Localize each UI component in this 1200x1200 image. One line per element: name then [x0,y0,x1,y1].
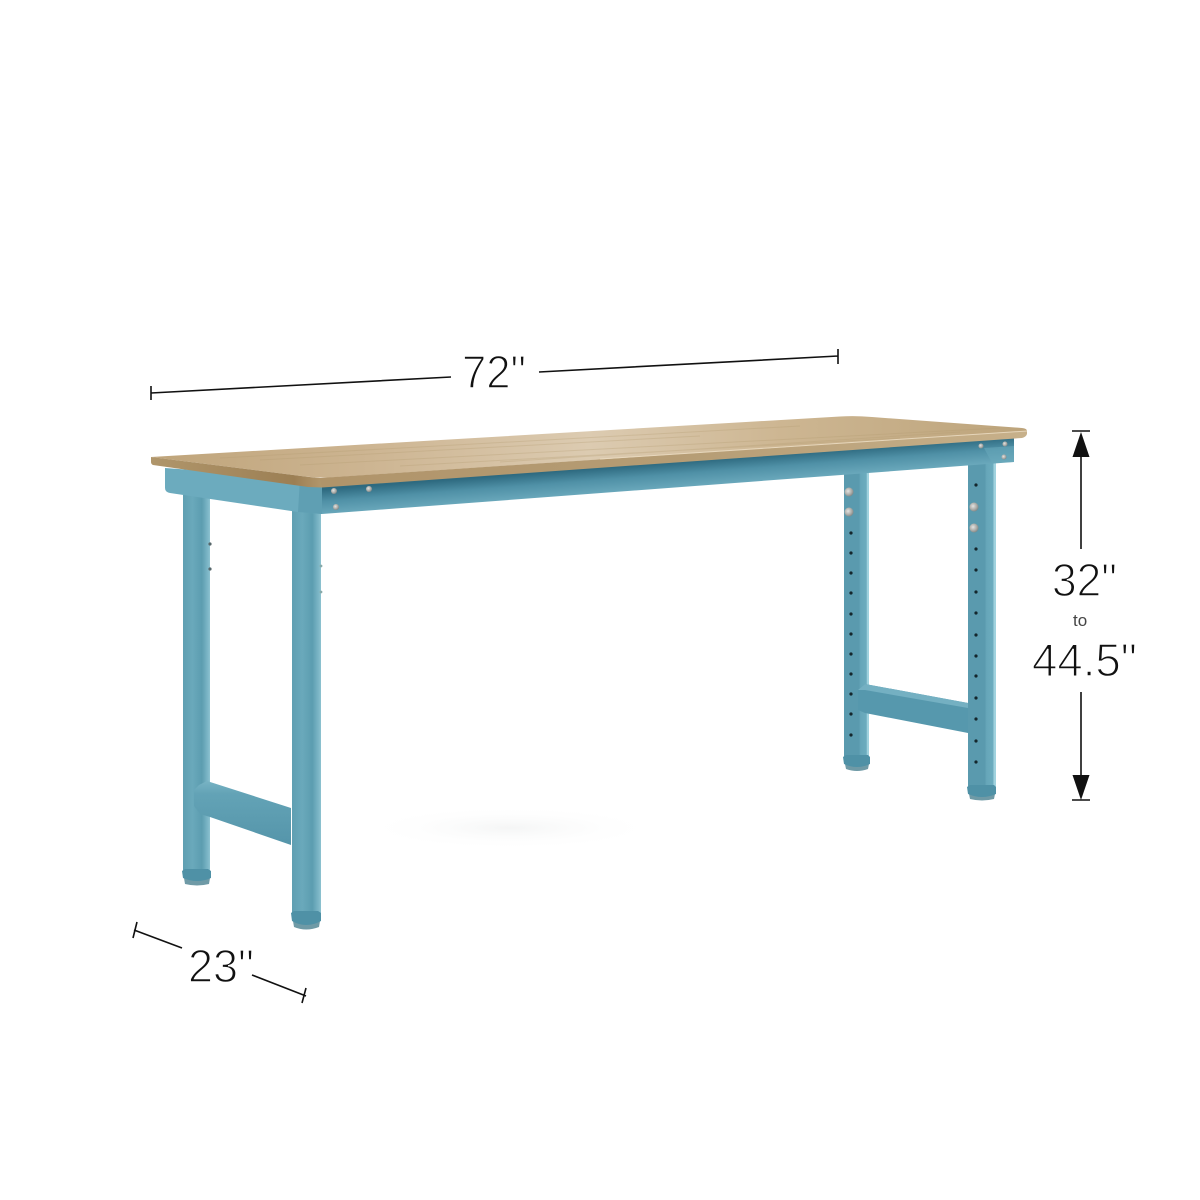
dimension: 32 to 44.5 inch height [1032,431,1137,800]
arrow up [1072,432,1090,457]
dimension: 23 inch depth: 23" [188,940,254,992]
rear crossbar [858,684,968,733]
label: 32: 32" [1052,554,1117,606]
label: to: to [1073,611,1087,630]
front right leg [291,510,322,930]
front crossbar [194,781,291,845]
rear left leg [843,470,870,771]
rear leg adjustment holes [849,483,978,764]
dimension: 72 inch width [151,346,838,400]
label: 44.5: 44.5" [1032,634,1137,686]
apron frame [165,438,1014,514]
wooden tabletop [151,416,1027,488]
apron bolts [331,442,1008,510]
rear leg bolts [844,488,978,532]
dimension: 23 inch depth [133,922,306,1003]
dimension: 72 inch width: 72" [462,346,526,398]
arrow down [1072,775,1090,800]
floor shadow [360,806,660,850]
workbench [151,416,1027,930]
front left leg [182,494,212,886]
rear right leg [967,460,996,800]
